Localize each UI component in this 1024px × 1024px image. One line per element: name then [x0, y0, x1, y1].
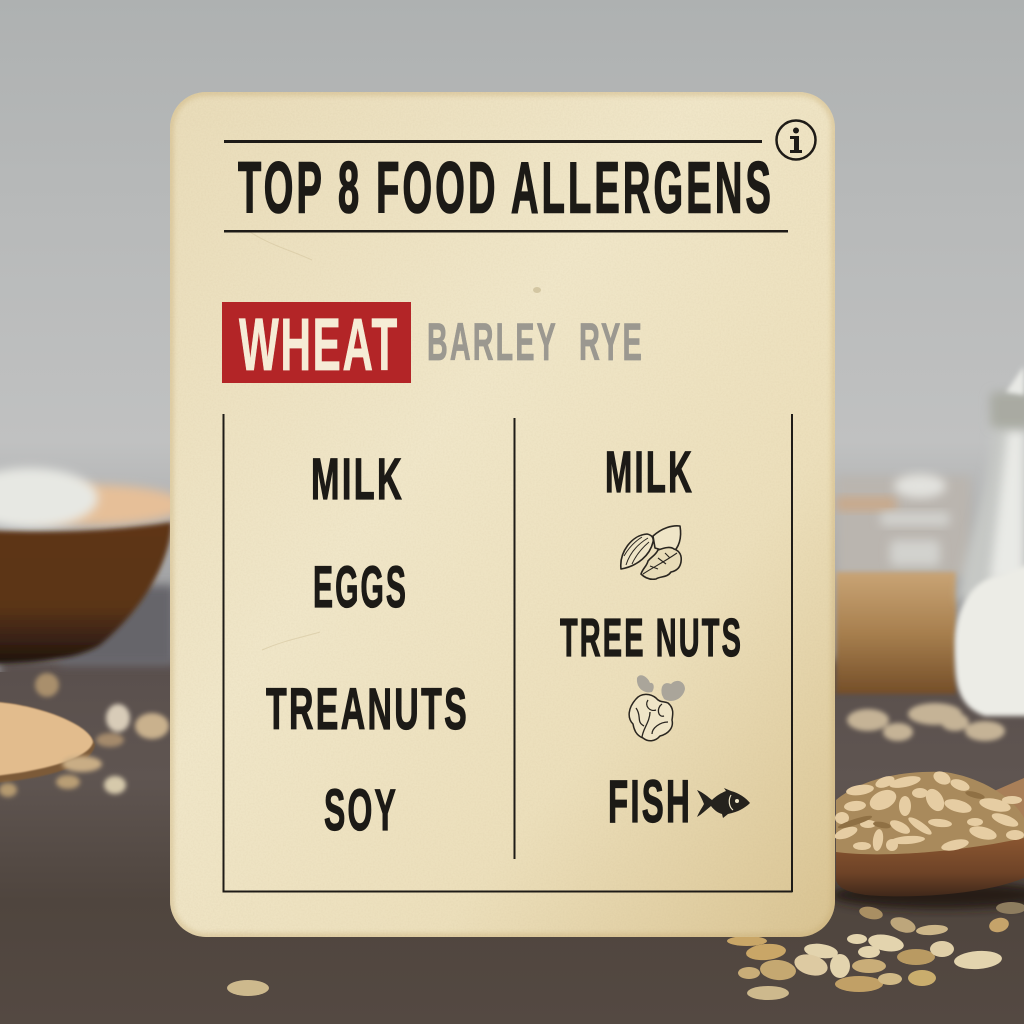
item: milk: MILK [311, 447, 404, 512]
panel: paper card [170, 92, 835, 937]
photo: scattered grains foreground [227, 902, 1024, 1000]
item: treanuts: TREANUTS [266, 677, 469, 742]
item: fish: FISH [608, 768, 692, 835]
item: soy: SOY [324, 778, 398, 843]
item: eggs: EGGS [313, 555, 408, 620]
photo: wooden board and blurred grains left [0, 673, 169, 797]
left column: allergens [266, 447, 469, 843]
photo: milk bottle [955, 366, 1024, 716]
icon: info [776, 120, 816, 160]
right column: allergens [560, 440, 743, 835]
icon: mixed nuts [621, 526, 681, 579]
photo: glass jar of grain [836, 474, 971, 694]
icon: fish [697, 788, 750, 818]
item: milk: MILK [605, 440, 694, 505]
table frame [222, 414, 793, 892]
tag: wheat highlighted: WHEAT [239, 303, 399, 386]
background: wall [0, 0, 1024, 680]
tag: wheat highlighted [222, 302, 411, 386]
photo: wooden spoon with grains [830, 769, 1024, 909]
title rule: bottom [224, 230, 788, 232]
background: table [0, 660, 1024, 1024]
tag: barley: BARLEY [427, 313, 558, 372]
item: tree nuts: TREE NUTS [560, 608, 743, 668]
icon: walnut with grey leaves [629, 675, 685, 741]
tag: rye: RYE [579, 313, 644, 372]
photo: blurred grains behind right [847, 703, 1005, 741]
photo: wooden bowl with flour [0, 468, 185, 665]
title rule: top [224, 140, 762, 143]
